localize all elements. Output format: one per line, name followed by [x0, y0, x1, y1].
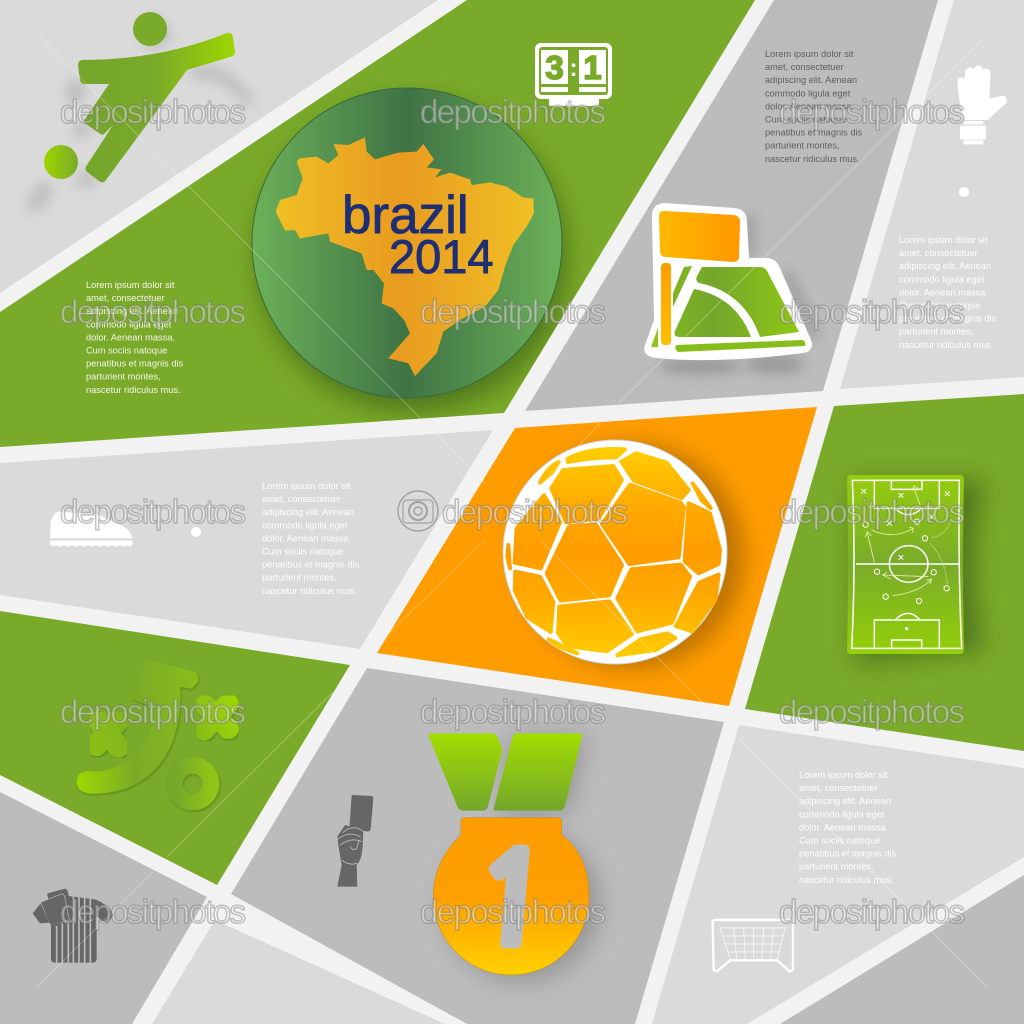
- text block: boot panel: dolor. Aenean massa.: [262, 533, 351, 543]
- flag cloth: [659, 211, 740, 262]
- cross left: [97, 720, 118, 747]
- text block: green panel: adipiscing elit. Aenean: [86, 306, 178, 316]
- left sleeve: [33, 903, 49, 923]
- panel: ball orange: [377, 407, 817, 706]
- pitch slivers: [673, 266, 692, 307]
- sticker: brazil disc: [252, 88, 568, 412]
- score 1: 1: [583, 49, 602, 86]
- text block: green panel: commodo ligula eget: [86, 319, 172, 329]
- player body: [78, 33, 235, 182]
- text block: goal panel: penatibus et magnis dis: [799, 849, 897, 859]
- panel: player top-left: [0, 0, 438, 293]
- watermark text: depositphotos: [60, 293, 246, 330]
- sticker: tactics pitch: [847, 475, 985, 664]
- text block: boot panel: commodo ligula eget: [262, 520, 348, 530]
- circle marker: [174, 765, 211, 802]
- text block: gray panel: Cum sociis natoque: [765, 114, 846, 124]
- text block: gray panel: adipiscing elit. Aenean: [765, 75, 857, 85]
- text block: glove panel: Lorem ipsum dolor sit: [899, 235, 988, 245]
- text block: goal panel: dolor. Aenean massa.: [799, 822, 888, 832]
- ribbon right: [494, 733, 582, 811]
- panel: goal light gray: [652, 725, 1024, 1024]
- watermark text: depositphotos: [60, 893, 246, 930]
- text block: boot panel: Lorem ipsum dolor sit: [262, 481, 351, 491]
- text block: glove panel: nascetur ridiculus mus.: [899, 340, 994, 350]
- watermark text: depositphotos: [420, 293, 606, 330]
- sticker outline: [644, 203, 812, 360]
- text block: boot panel: parturient montes,: [262, 573, 337, 583]
- front card: [41, 894, 69, 925]
- title: 2014: 2014: [389, 230, 494, 283]
- watermark text: depositphotos: [420, 93, 606, 130]
- title: brazil: brazil: [342, 186, 469, 245]
- watermark text: depositphotos: [60, 493, 246, 530]
- text block: boot panel: nascetur ridiculus mus.: [262, 586, 357, 596]
- pitch markings: [852, 480, 962, 648]
- panel: medal gray: [231, 668, 724, 1024]
- curved arrow: [77, 659, 198, 794]
- text block: gray panel: nascetur ridiculus mus.: [765, 154, 860, 164]
- score colon: :: [570, 55, 578, 82]
- goal frame: [713, 920, 793, 971]
- outer field: [696, 267, 799, 337]
- watermark text: [60, 93, 965, 930]
- panel: flag gray: [525, 0, 938, 411]
- score panels: [541, 50, 568, 84]
- ball patches: [507, 449, 720, 655]
- goal net: [720, 928, 785, 960]
- ribbon left: [429, 733, 502, 811]
- watermark text: depositphotos: [779, 293, 965, 330]
- text block: green panel: nascetur ridiculus mus.: [86, 385, 181, 395]
- text block: green panel: Lorem ipsum dolor sit: [86, 280, 175, 290]
- icon: football boot: [50, 512, 132, 547]
- touch line: [675, 340, 805, 352]
- panel: boot light gray: [0, 430, 493, 649]
- text block: goal panel: parturient montes,: [799, 862, 874, 872]
- text block: glove panel: Cum sociis natoque: [899, 300, 980, 310]
- watermark text: depositphotos: [420, 693, 606, 730]
- text block: boot panel: Cum sociis natoque: [262, 546, 343, 556]
- panel: tactics green: [0, 611, 350, 885]
- player head: [133, 12, 167, 46]
- panel: corner gray: [780, 875, 1024, 1024]
- medal number: 1: [468, 838, 555, 963]
- text block: goal panel: amet, consectetuer: [799, 783, 878, 793]
- hand: [337, 825, 363, 887]
- icon: kicking player: [23, 12, 256, 216]
- text block: gray panel: penatibus et magnis dis: [765, 128, 863, 138]
- icon: goalkeeper glove: [957, 65, 1007, 144]
- text block: boot panel: amet, consectetuer: [262, 494, 341, 504]
- cross right: [204, 704, 228, 730]
- score 3: 3: [545, 49, 564, 86]
- icon: goal net: [713, 920, 793, 971]
- watermark text: depositphotos: [779, 493, 965, 530]
- card: [349, 795, 373, 831]
- text block: glove panel: amet, consectetuer: [899, 248, 978, 258]
- panel: shirt gray: [0, 792, 207, 1024]
- icon: referee card hand: [337, 795, 373, 887]
- sticker: gold medal: [429, 733, 600, 982]
- text block: gray panel: Lorem ipsum dolor sit: [765, 49, 854, 59]
- scoreboard stand: [549, 96, 599, 106]
- text block: goal panel: Cum sociis natoque: [799, 836, 880, 846]
- text block: goal panel: nascetur ridiculus mus.: [799, 875, 894, 885]
- rear card: [47, 888, 73, 925]
- text block: glove panel: parturient montes,: [899, 327, 974, 337]
- sticker: tactics symbols: [77, 659, 228, 802]
- text block: glove panel: dolor. Aenean massa.: [899, 287, 988, 297]
- shirt body: [51, 896, 114, 963]
- panel: glove light gray: [840, 0, 1024, 389]
- text block: green panel: Cum sociis natoque: [86, 346, 167, 356]
- watermark camera icon: [398, 491, 438, 531]
- watermark text: depositphotos: [60, 93, 246, 130]
- watermark text: depositphotos: [60, 693, 246, 730]
- panel: brazil green: [0, 0, 755, 447]
- text block: glove panel: penatibus et magnis dis: [899, 314, 997, 324]
- text block: gray panel: parturient montes,: [765, 141, 840, 151]
- flag pole: [661, 263, 671, 345]
- watermark text: depositphotos: [420, 893, 606, 930]
- watermark text: depositphotos: [779, 93, 965, 130]
- text block: gray panel: dolor. Aenean massa.: [765, 101, 854, 111]
- watermark text: depositphotos: [779, 893, 965, 930]
- text block: boot panel: penatibus et magnis dis: [262, 560, 360, 570]
- glove dot: [959, 187, 969, 197]
- icon: scoreboard: [535, 43, 612, 106]
- player ball: [44, 145, 78, 179]
- corner arc: [675, 289, 751, 337]
- panel: pitch green: [745, 394, 1024, 751]
- text block: gray panel: commodo ligula eget: [765, 88, 851, 98]
- text block: gray panel: amet, consectetuer: [765, 62, 844, 72]
- disc: [252, 88, 562, 398]
- text block: boot panel: adipiscing elit. Aenean: [262, 507, 354, 517]
- sticker: corner flag: [644, 203, 820, 375]
- text block: goal panel: commodo ligula eget: [799, 809, 885, 819]
- ball outline: [503, 440, 727, 664]
- brazil map: [276, 137, 534, 376]
- icon: referee shirt: [33, 888, 114, 963]
- pitch sheet: [847, 475, 964, 654]
- medal disc: [433, 818, 589, 975]
- watermark text: depositphotos: [442, 493, 628, 530]
- watermark text: depositphotos: [779, 693, 965, 730]
- scoreboard frame: [535, 43, 612, 99]
- text block: glove panel: commodo ligula eget: [899, 274, 985, 284]
- text block: green panel: dolor. Aenean massa.: [86, 332, 175, 342]
- panel: bottom light gray: [152, 920, 445, 1024]
- shirt stripes: [57, 897, 90, 963]
- text block: glove panel: adipiscing elit. Aenean: [899, 261, 991, 271]
- text block: green panel: amet, consectetuer: [86, 293, 165, 303]
- text block: green panel: penatibus et magnis dis: [86, 359, 184, 369]
- sticker: football: [503, 440, 744, 668]
- text block: green panel: parturient montes,: [86, 372, 161, 382]
- boot dot: [191, 527, 201, 537]
- text block: goal panel: Lorem ipsum dolor sit: [799, 770, 888, 780]
- text block: goal panel: adipiscing elit. Aenean: [799, 796, 891, 806]
